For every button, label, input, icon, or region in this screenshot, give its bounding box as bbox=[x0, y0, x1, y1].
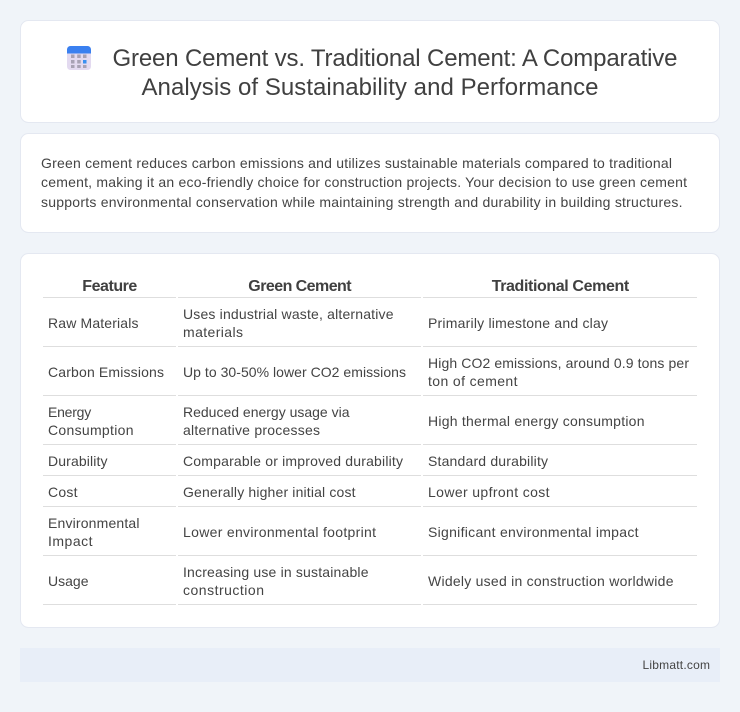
row: usage: construction bbox=[183, 582, 264, 598]
row: raw materials: Uses industrial waste, alternative bbox=[183, 306, 394, 322]
row: carbon emissions: ton of cement bbox=[428, 373, 518, 389]
row: energy consumption: High thermal energy consumption bbox=[428, 413, 644, 429]
row: carbon emissions: High CO2 emissions, around 0.9 tons per bbox=[428, 355, 689, 371]
row: energy consumption: Reduced energy usage via bbox=[183, 404, 350, 420]
row: cost: Lower upfront cost bbox=[428, 484, 550, 500]
row: durability: Durability bbox=[48, 453, 108, 469]
table header row: Feature bbox=[82, 278, 137, 295]
row: energy consumption: Consumption bbox=[48, 422, 134, 438]
row: carbon emissions: Carbon Emissions bbox=[48, 364, 164, 380]
row: environmental impact bbox=[48, 515, 639, 549]
row: cost: Generally higher initial cost bbox=[183, 484, 356, 500]
row: usage: Widely used in construction worldwide bbox=[428, 573, 674, 589]
panel: comparison table bbox=[20, 254, 720, 628]
row: raw materials: materials bbox=[183, 324, 243, 340]
row: cost bbox=[48, 484, 550, 500]
row: environmental impact: Significant environmental impact bbox=[428, 524, 639, 540]
row: durability bbox=[48, 453, 548, 469]
row: usage: Usage bbox=[48, 573, 89, 589]
row: energy consumption bbox=[48, 404, 644, 438]
panel: intro text bbox=[20, 134, 720, 232]
title: Analysis of Sustainability and Performance bbox=[142, 74, 598, 101]
row: carbon emissions bbox=[48, 355, 689, 389]
row: environmental impact: Lower environmental footprint bbox=[183, 524, 376, 540]
panel: title header bbox=[20, 20, 720, 122]
row: carbon emissions: Up to 30-50% lower CO2 emissions bbox=[183, 364, 406, 380]
footer source text: Libmatt.com bbox=[642, 658, 710, 672]
row: energy consumption: Energy bbox=[48, 404, 91, 420]
footer bar bbox=[20, 648, 720, 682]
title: Green Cement vs. Traditional Cement: A Comparative bbox=[112, 45, 678, 72]
row: cost: Cost bbox=[48, 484, 78, 500]
title bbox=[112, 45, 678, 101]
row: usage: Increasing use in sustainable bbox=[183, 564, 369, 580]
table header row bbox=[82, 278, 630, 295]
text block: introduction bbox=[41, 155, 687, 210]
table header row: Green Cement bbox=[248, 278, 352, 295]
row: environmental impact: Impact bbox=[48, 533, 93, 549]
row: durability: Comparable or improved durability bbox=[183, 453, 403, 469]
row: raw materials: Primarily limestone and clay bbox=[428, 315, 608, 331]
row: raw materials bbox=[48, 306, 608, 340]
text block: introduction: supports environmental conservation while maintaining strength and durability in building structures. bbox=[41, 194, 682, 210]
icon: calendar bbox=[67, 46, 91, 70]
row: environmental impact: Environmental bbox=[48, 515, 140, 531]
row: durability: Standard durability bbox=[428, 453, 548, 469]
text block: introduction: Green cement reduces carbon emissions and utilizes sustainable materials compared to traditional bbox=[41, 155, 672, 171]
text block: introduction: cement, making it an eco-friendly choice for construction projects. Your decision to use green cement bbox=[41, 174, 687, 190]
table header row: Traditional Cement bbox=[492, 278, 630, 295]
row: usage bbox=[48, 564, 674, 598]
row: energy consumption: alternative processes bbox=[183, 422, 320, 438]
row: raw materials: Raw Materials bbox=[48, 315, 138, 331]
